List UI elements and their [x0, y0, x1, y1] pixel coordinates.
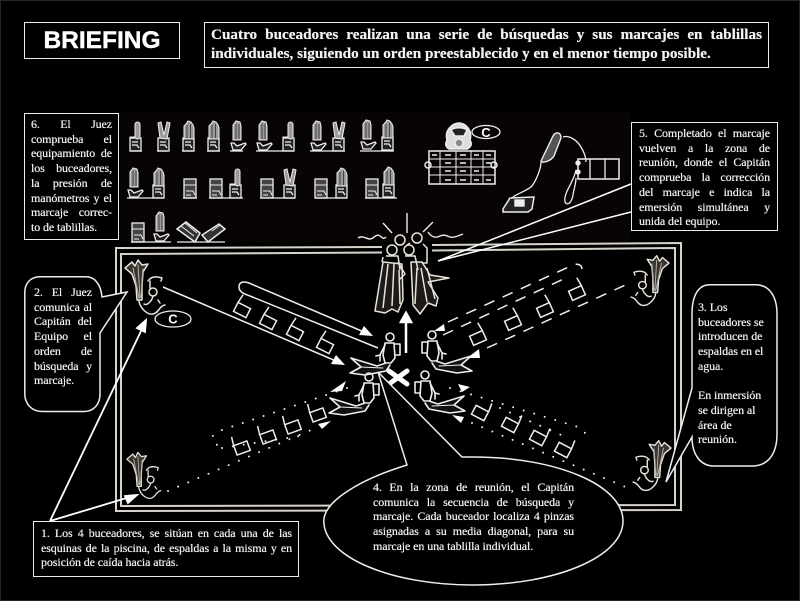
- callout pointer from box 5: [438, 184, 631, 261]
- corner diver: top right: [631, 256, 669, 305]
- callout 3: divers enter water: 3. Los: [698, 300, 727, 314]
- lane: bottom left dotted search lane: [168, 388, 347, 491]
- callout 3 outline: [665, 284, 778, 482]
- callout 3: divers enter water: agua.: [698, 359, 723, 373]
- callout 3: divers enter water: [665, 284, 778, 482]
- callout 2: judge tells captain: Equipo el: [34, 329, 92, 343]
- callout 3: divers enter water: se dirigen al: [698, 403, 755, 417]
- callout 5: return to meeting zone: vuelven a la zona de: [639, 141, 770, 155]
- callout 2: judge tells captain: comunica al: [34, 300, 92, 314]
- callout arrows from box 1: [50, 320, 146, 521]
- callout 6: judge checks: to de tablillas.: [31, 220, 97, 234]
- callout 3: divers enter water: espaldas en el: [698, 344, 763, 358]
- callout 5: return to meeting zone: comprueba la corrección: [639, 170, 770, 184]
- callout 4: captain communicates sequence: asignadas a su media diagonal, para su: [373, 524, 574, 538]
- corner C marker: [155, 311, 191, 327]
- lane: bottom right dotted search lane: [450, 388, 628, 488]
- callout 4: captain communicates sequence: marcaje. Cada buceador localiza 4 pinzas: [373, 509, 574, 523]
- callout 5: return to meeting zone: emersión simultánea y: [639, 200, 770, 214]
- callout 3: divers enter water: área de: [698, 418, 732, 432]
- title: [24, 22, 180, 59]
- callout 1: divers at corners: [33, 521, 299, 577]
- callout 6: judge checks: los buceadores,: [31, 161, 112, 175]
- corner diver: bottom left: [127, 452, 161, 498]
- callout 4: captain communicates sequence: marcaje en una tablilla individual.: [373, 539, 533, 553]
- callout 6: judge checks: manómetros y el: [31, 191, 112, 205]
- surface waves and rays: [358, 213, 463, 239]
- callout 2: judge tells captain: marcaje.: [34, 373, 74, 387]
- callout 4: captain communicates sequence: [323, 372, 624, 586]
- title: BRIEFING: [43, 27, 161, 54]
- callout 6: judge checks: [24, 113, 119, 240]
- callout 2: judge tells captain: [24, 276, 129, 412]
- callout 5: return to meeting zone: del marcaje e indica la: [639, 185, 770, 199]
- background tint behind signals: [120, 112, 630, 242]
- callout 5: return to meeting zone: [631, 122, 778, 231]
- callout 1: divers at corners: esquinas de la piscina, de espaldas a la misma y en: [41, 541, 292, 555]
- callout 3: divers enter water: reunión.: [698, 432, 737, 446]
- callout 6: judge checks: marcaje correc-: [31, 205, 112, 219]
- callout 2: judge tells captain: búsqueda y: [34, 359, 92, 373]
- intro text box: Cuatro buceadores realizan una serie de búsquedas y sus marcajes en tablillas: [211, 26, 762, 43]
- callout 4: captain communicates sequence: comunica la secuencia de búsqueda y: [373, 495, 574, 509]
- callout 3: divers enter water: buceadores se: [698, 315, 764, 329]
- callout 6: judge checks: 6. El Juez: [31, 117, 112, 131]
- meeting point X: [389, 371, 407, 384]
- callout 4 outline: [323, 372, 624, 586]
- callout 5: return to meeting zone: reunión, donde el Capitán: [639, 155, 770, 169]
- callout 1: divers at corners: 1. Los 4 buceadores, se sitúan en cada una de las: [41, 526, 292, 540]
- lane: top right dashed search lane: [434, 264, 632, 358]
- arrow: team ascent: [401, 313, 411, 353]
- callout 6: judge checks: la presión de: [31, 176, 112, 190]
- corner diver: bottom right: [633, 441, 671, 490]
- callout 6: judge checks: equipamiento de: [31, 146, 112, 160]
- intro text box: individuales, siguiendo un orden preestablecido y en el menor tiempo posible.: [211, 44, 711, 62]
- corner C marker: C: [168, 312, 178, 326]
- icon: C marker ellipse: [472, 125, 500, 140]
- callout 1: divers at corners: posición de caída hacia atrás.: [41, 555, 178, 569]
- callout 2 outline: [24, 276, 129, 412]
- captain head and search table icon: [425, 123, 497, 184]
- callout 3: divers enter water: En inmersión: [698, 388, 761, 402]
- corner diver: top left: [125, 260, 165, 314]
- callout 2: judge tells captain: 2. El Juez: [34, 285, 92, 299]
- pool outline: [116, 243, 681, 511]
- team of divers at the surface: [375, 233, 449, 314]
- callout 2: judge tells captain: orden de: [34, 344, 92, 358]
- callout 3: divers enter water: introducen de: [698, 329, 762, 343]
- central divers: [329, 331, 472, 415]
- callout 6: judge checks: comprueba el: [31, 132, 112, 146]
- lane: top left solid search lane: [163, 282, 378, 365]
- intro text box: [204, 22, 769, 68]
- icon: C marker ellipse: C: [481, 125, 491, 140]
- callout 4: captain communicates sequence: 4. En la zona de reunión, el Capitán: [373, 480, 574, 494]
- hand signals chart: [127, 120, 397, 242]
- callout 5: return to meeting zone: unida del equipo.: [639, 214, 720, 228]
- icon: slate and marker on cord: [503, 133, 619, 212]
- callout 5: return to meeting zone: 5. Completado el marcaje: [639, 126, 770, 140]
- callout 2: judge tells captain: Capitán del: [34, 314, 92, 328]
